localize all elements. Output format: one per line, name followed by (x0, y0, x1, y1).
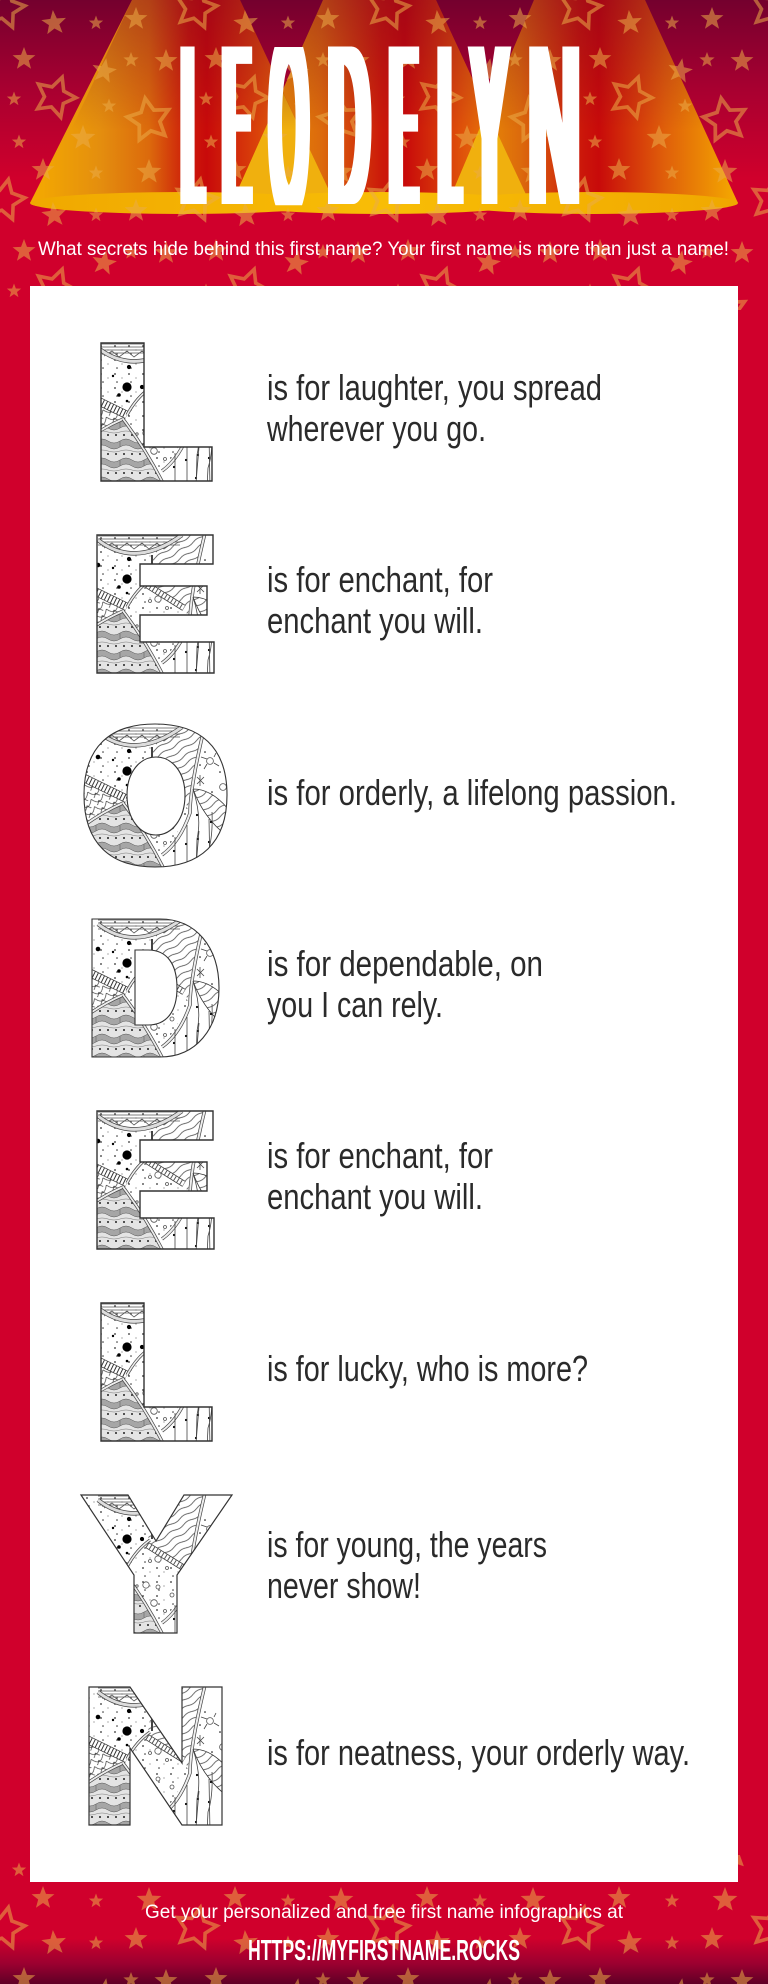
icon: letter E (96, 1110, 215, 1250)
row: Y for young (78, 1489, 547, 1640)
title: E (224, 0, 249, 253)
text: enchant: is for enchant, for (267, 1135, 493, 1176)
spotlights (30, 0, 738, 214)
icon: letter Y (80, 1494, 234, 1634)
subtitle: What secrets hide behind this first name? Your first name is more than just a name! (38, 238, 729, 260)
text: enchant: is for enchant, for (267, 559, 493, 600)
text: dependable (267, 943, 543, 1025)
footer url: HTTPS://MYFIRSTNAME.ROCKS (248, 1935, 520, 1967)
text: young (267, 1524, 547, 1606)
star pattern: top (0, 0, 768, 310)
white panel (30, 286, 738, 1882)
row: E for enchant again (96, 1110, 492, 1250)
icon: letter L (100, 1302, 213, 1442)
row: O for orderly (78, 721, 677, 872)
text: orderly: is for orderly, a lifelong passion. (267, 772, 677, 813)
footer text: Get your personalized and free first name infographics at (145, 1902, 624, 1923)
icon: letter D (91, 918, 220, 1058)
title: Y (472, 0, 507, 253)
row: E for enchant (96, 534, 492, 674)
text: laughter: is for laughter, you spread (267, 367, 602, 408)
text: lucky: is for lucky, who is more? (267, 1348, 588, 1389)
text: laughter (266, 367, 602, 449)
icon: letter E (96, 534, 215, 674)
text: young: never show! (267, 1565, 421, 1606)
text: young: is for young, the years (267, 1524, 547, 1565)
text: laughter: wherever you go. (266, 408, 486, 449)
row: D for dependable (91, 918, 541, 1058)
icon: letter N (88, 1686, 223, 1826)
title: D (329, 0, 369, 253)
title: E (391, 0, 416, 253)
title: L (440, 0, 459, 253)
icon: letter O (83, 724, 228, 868)
icon: letter L (100, 342, 213, 482)
text: enchant: enchant you will. (267, 600, 483, 641)
title: N (529, 0, 580, 253)
star pattern: bottom (0, 1855, 768, 1984)
title: L (183, 0, 202, 253)
row: L for lucky (100, 1302, 587, 1442)
title (180, 0, 580, 253)
text: enchant (267, 559, 493, 641)
text: dependable: you I can rely. (267, 984, 443, 1025)
text: enchant (267, 1135, 493, 1217)
text: enchant: enchant you will. (267, 1176, 483, 1217)
row: N for neatness (78, 1681, 690, 1832)
row: L for laughter (100, 342, 600, 482)
text: dependable: is for dependable, on (267, 943, 543, 984)
